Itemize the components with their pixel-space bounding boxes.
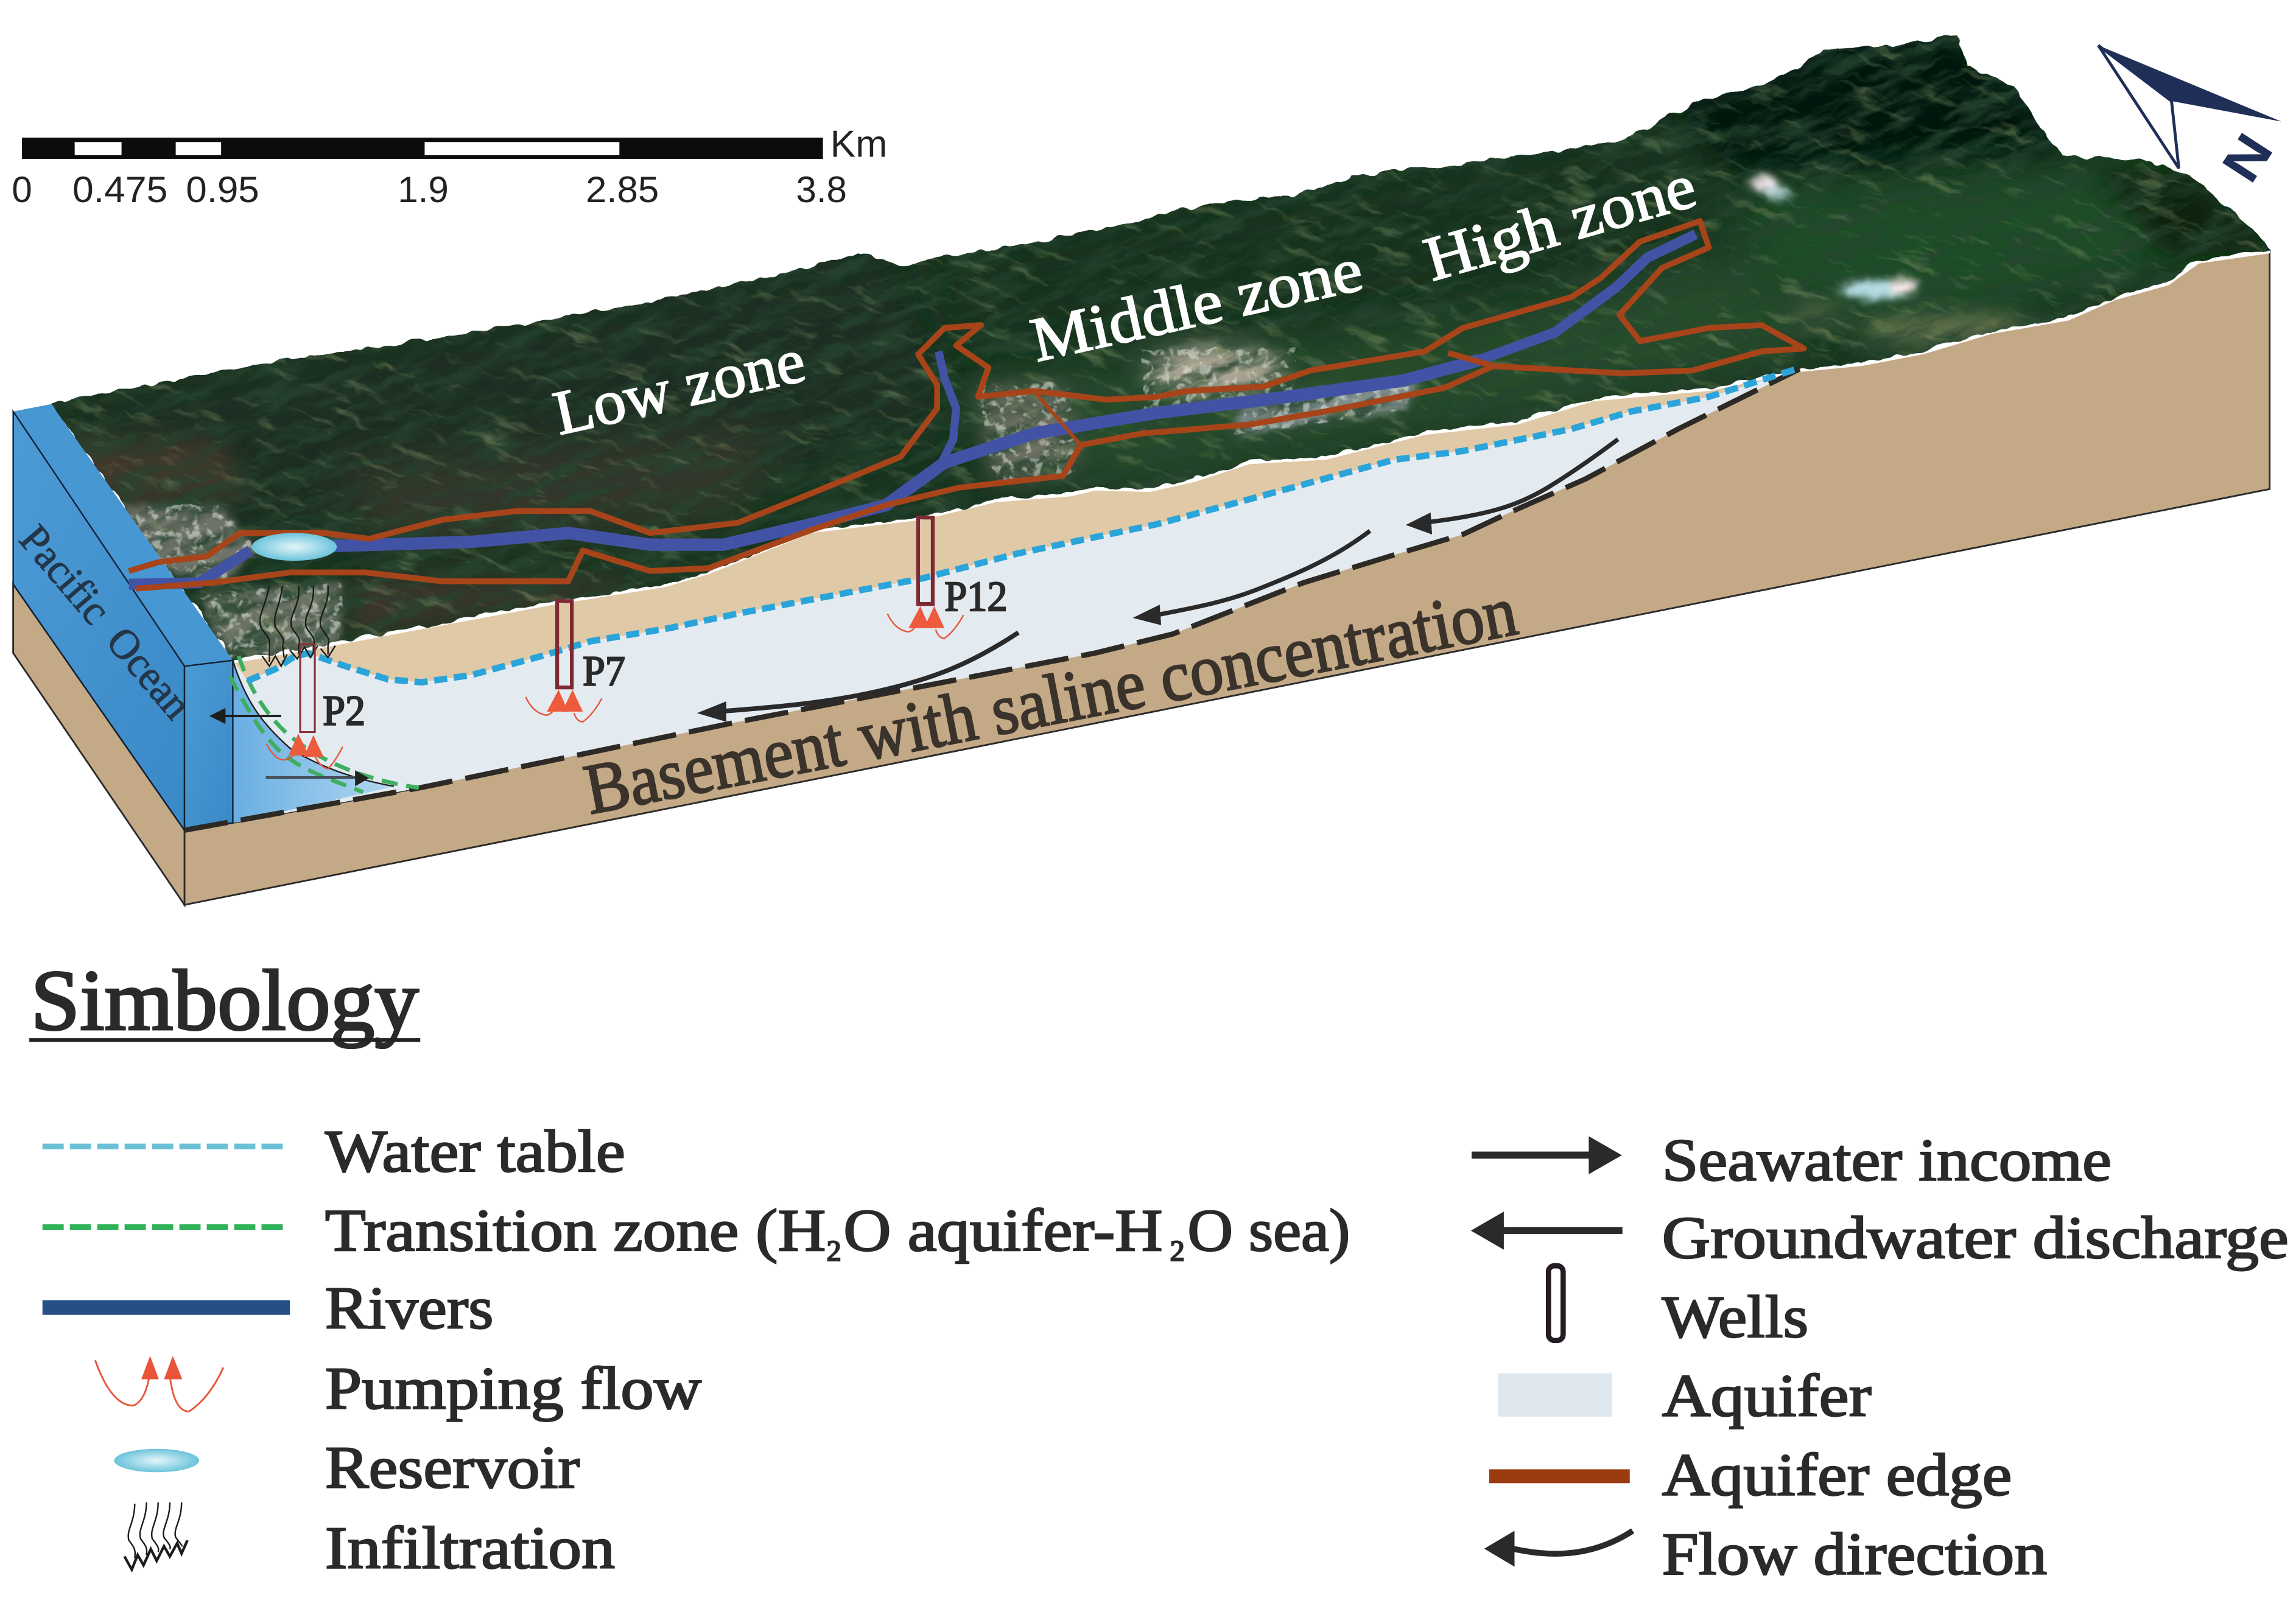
cloud patches bbox=[1750, 176, 1917, 299]
legend: water table: Water table bbox=[325, 1118, 625, 1185]
basement rock bbox=[184, 250, 2270, 905]
sea top surface bbox=[13, 404, 233, 666]
pumping flow P12 bbox=[887, 606, 963, 639]
legend: rivers: Rivers bbox=[325, 1275, 493, 1341]
reservoir bbox=[252, 533, 337, 561]
sea side face bbox=[13, 412, 184, 830]
satellite terrain bbox=[51, 35, 2271, 661]
legend: rivers bbox=[43, 1275, 493, 1341]
legend: infiltration: Infiltration bbox=[325, 1515, 615, 1582]
left side rock face bbox=[13, 584, 184, 905]
flow arrow middle bbox=[1132, 531, 1370, 625]
legend: reservoir: Reservoir bbox=[325, 1434, 580, 1501]
flow arrow high bbox=[1406, 440, 1618, 535]
sea front face bbox=[184, 661, 233, 830]
legend: transition zone: 2 bbox=[1170, 1235, 1185, 1268]
saline front curve bbox=[233, 661, 394, 786]
legend: transition zone bbox=[43, 1198, 1350, 1268]
label: basement: Basement with saline concentration bbox=[578, 571, 1523, 830]
legend: groundwater discharge: Groundwater discharge bbox=[1662, 1205, 2289, 1271]
scale bar: Km bbox=[830, 122, 887, 165]
scale bar: 0.95 bbox=[186, 169, 259, 210]
transition zone dashed lines bbox=[230, 656, 419, 792]
legend: transition zone: O aquifer-H bbox=[843, 1198, 1163, 1264]
unsaturated soil layer bbox=[233, 369, 1800, 682]
legend: transition zone: O sea) bbox=[1187, 1198, 1350, 1264]
terrain bottom white edge bbox=[233, 250, 2270, 661]
scale bar: 1.9 bbox=[398, 169, 449, 210]
water table dashed line bbox=[247, 369, 1797, 682]
legend: seawater income: Seawater income bbox=[1662, 1127, 2112, 1193]
scale bar bbox=[12, 122, 887, 210]
river bbox=[129, 234, 1696, 584]
legend: pumping flow: Pumping flow bbox=[325, 1356, 701, 1422]
legend: aquifer edge: Aquifer edge bbox=[1662, 1442, 2012, 1508]
pumping flow P2 bbox=[267, 734, 343, 769]
infiltration arrows bbox=[260, 586, 335, 666]
block diagram bbox=[12, 35, 2271, 908]
aquifer edge bbox=[129, 221, 1804, 589]
terrain colour zones bbox=[51, 35, 2271, 659]
well P2 bbox=[300, 644, 365, 734]
label: Middle zone: Middle zone bbox=[1025, 234, 1369, 376]
legend: groundwater discharge bbox=[1471, 1205, 2289, 1271]
well P2: P2 bbox=[323, 687, 365, 734]
legend: aquifer edge bbox=[1489, 1442, 2012, 1508]
legend: flow direction: Flow direction bbox=[1662, 1521, 2047, 1587]
legend: flow direction bbox=[1484, 1521, 2047, 1587]
flow arrow low bbox=[697, 633, 1019, 722]
legend: pumping flow bbox=[95, 1356, 701, 1422]
legend: aquifer: Aquifer bbox=[1662, 1363, 1872, 1429]
scale bar: 0.475 bbox=[72, 169, 167, 210]
legend: infiltration bbox=[124, 1503, 615, 1582]
seawater intrusion wedge bbox=[233, 661, 394, 823]
legend: wells bbox=[1548, 1266, 1808, 1350]
scale bar: 3.8 bbox=[796, 169, 847, 210]
scale bar: 2.85 bbox=[586, 169, 659, 210]
groundwater discharge arrow bbox=[209, 708, 281, 724]
well P12: P12 bbox=[944, 574, 1008, 620]
north arrow: N bbox=[2211, 124, 2284, 192]
label: Low zone: Low zone bbox=[547, 326, 811, 449]
legend: transition zone: Transition zone (H bbox=[325, 1198, 826, 1264]
seawater income arrow bbox=[266, 770, 369, 786]
label: High zone: High zone bbox=[1417, 151, 1704, 295]
legend: seawater income bbox=[1472, 1127, 2112, 1193]
basement dashed boundary bbox=[184, 369, 1800, 830]
aquifer bbox=[233, 369, 1800, 823]
legend: reservoir bbox=[114, 1434, 580, 1501]
legend heading: Simbology bbox=[31, 953, 419, 1048]
label: Pacific Ocean: Pacific Ocean bbox=[10, 516, 201, 728]
north arrow bbox=[2098, 46, 2284, 192]
well P12 bbox=[918, 517, 1008, 620]
scale bar: 0 bbox=[12, 169, 32, 210]
well P7: P7 bbox=[583, 648, 625, 695]
well P7 bbox=[557, 601, 625, 695]
pumping flow P7 bbox=[525, 690, 602, 722]
legend: transition zone: 2 bbox=[827, 1235, 841, 1268]
legend: aquifer bbox=[1498, 1363, 1872, 1429]
legend: wells: Wells bbox=[1662, 1284, 1808, 1350]
